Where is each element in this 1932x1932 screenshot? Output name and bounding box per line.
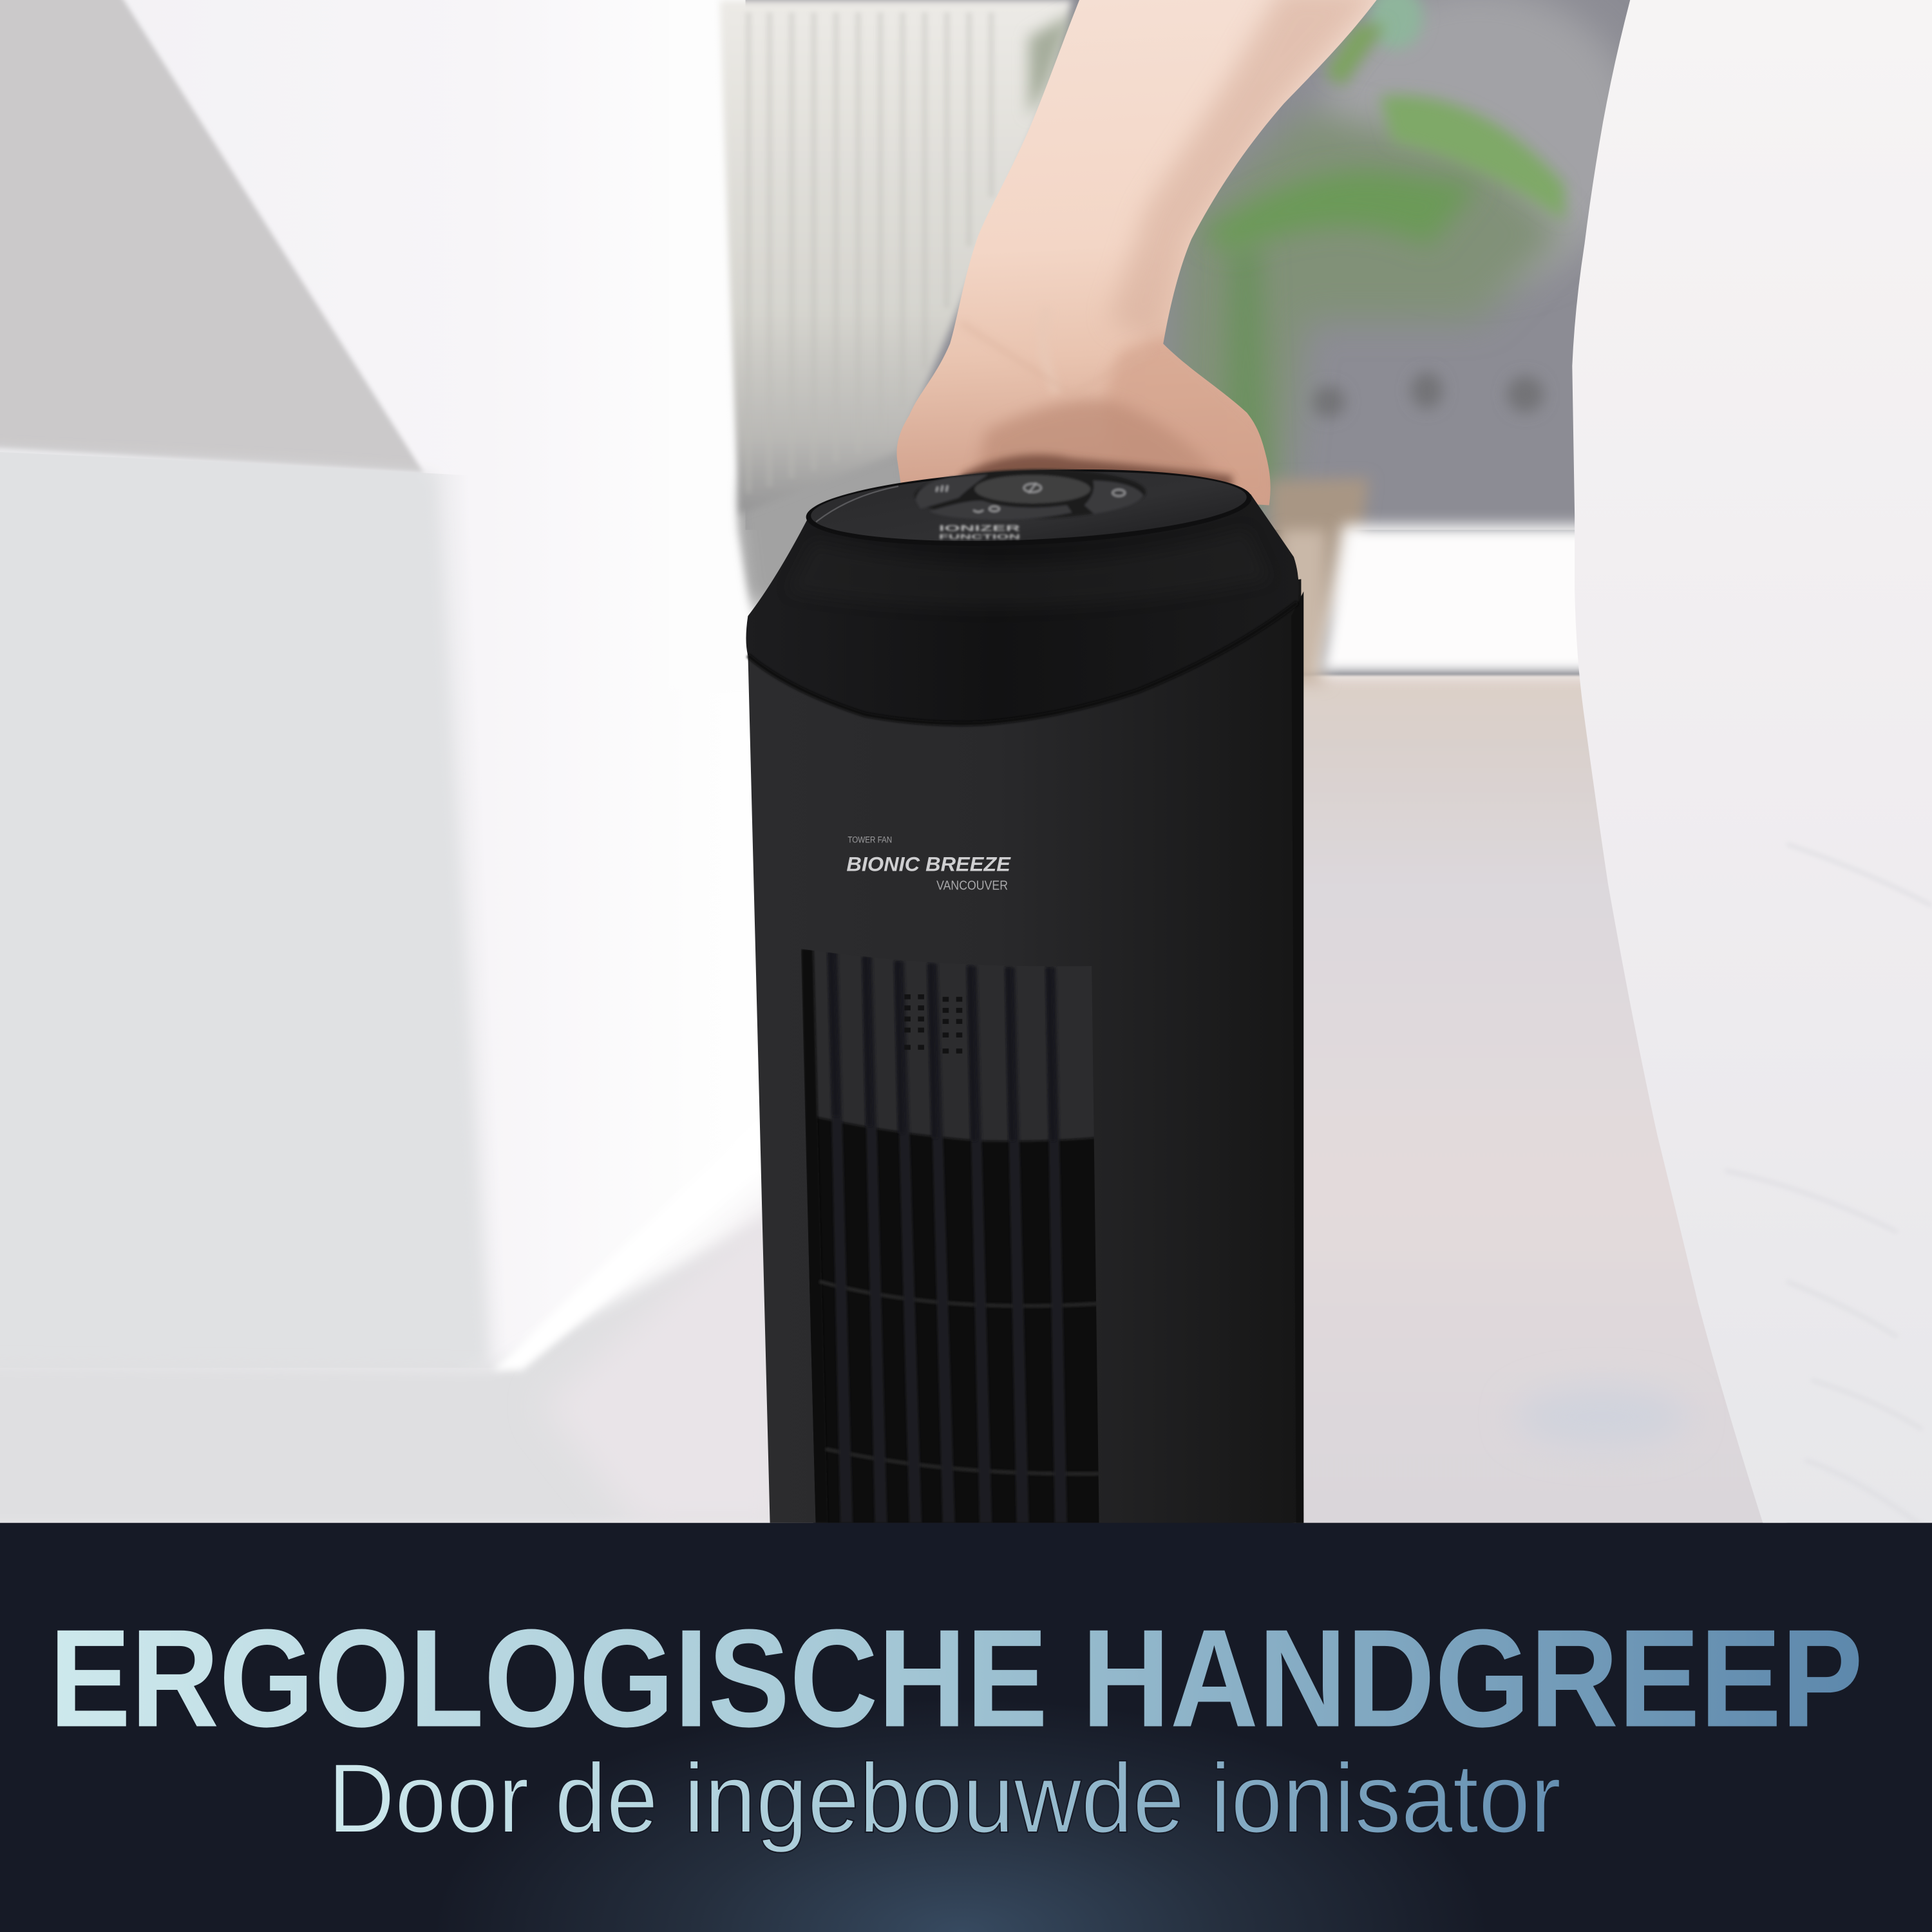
background: upper wall tint [1318,0,1639,283]
bar shadows on upper panel [828,951,1056,1141]
background: white block [1318,525,1602,675]
vertical bars [828,951,1067,1523]
hand and arm [897,0,1386,505]
ionizer vent dots [904,994,962,1054]
background: blurred plant [1171,0,1565,518]
tower fan line: TOWER FAN [848,835,892,845]
plant pale leaf [1369,0,1423,50]
power button [972,476,1093,507]
background: white fence [719,0,1072,515]
model name: VANCOUVER [936,878,1008,893]
plant fronds [1201,171,1479,252]
background: fence slats [746,12,994,493]
plant stem [1224,247,1269,480]
palm shade [973,399,1232,493]
brand name: BIONIC BREEZE [846,853,1011,876]
plant haze [1171,111,1565,518]
disc highlight [815,486,900,522]
power button face [974,475,1090,504]
plant bright frond [1380,95,1565,222]
background: bright baseboard [493,1090,788,1370]
button shadow ring [914,468,1146,521]
background: left wall base tone [457,980,486,1359]
fan speed icon [936,486,947,491]
background: tan floor strip by fan [1282,530,1326,684]
background: pink floor patch [571,1200,770,1523]
cap reflections [788,530,1269,607]
fan top cap [746,494,1299,724]
left button [916,475,988,509]
grille upper panel [788,936,1109,1158]
background: wall edge softening [665,0,754,690]
grille opening [807,1115,1109,1528]
wrist shade [1105,333,1275,505]
horizontal rings [819,1282,1103,1474]
hand shading [961,0,1386,505]
background: lower left wall [8,453,462,803]
finger gap shadow [961,455,1232,493]
outer forearm shade [1109,0,1386,345]
control buttons [914,468,1146,521]
panel bottom glow [370,1688,1553,1932]
power icon [1024,483,1041,493]
photo scene [0,0,1932,1534]
plant top green [1325,24,1386,86]
bottom button [929,500,1072,520]
control disc [804,461,1253,554]
background: white wall [0,0,813,1528]
background: fence base [727,419,936,665]
cap lower rim [748,603,1298,724]
person dress [1572,0,1932,1534]
ionizer label [939,524,1020,541]
dress folds [1725,844,1932,1534]
wrist crease [961,323,1152,394]
background: lower left floor [0,1244,770,1523]
brand logo [846,835,1011,893]
ionizer label: IONIZER [939,524,1020,533]
background: floor [1294,675,1786,1531]
right button [1084,480,1144,514]
subtitle: Door de ingebouwde ionisator [328,1743,1561,1853]
background: floor blue reflection [1515,1387,1688,1446]
fan body right edge [1291,591,1303,1528]
background: dark green leaves behind arm [1029,12,1074,117]
fan grille [788,936,1109,1528]
tower fan [746,461,1303,1528]
grille left edge shadow [801,949,828,1523]
fan body [748,579,1303,1528]
background: grey stair shadow [0,0,424,473]
swing icon [973,506,999,512]
ionizer label: FUNCTION [939,533,1020,541]
wrist tendons [1043,308,1057,392]
bottom caption panel [0,1523,1932,1932]
background: wall dark dots [1311,372,1544,418]
timer icon [1113,489,1125,496]
background: flower pot [1271,478,1369,675]
background: garden wall [746,0,1639,530]
